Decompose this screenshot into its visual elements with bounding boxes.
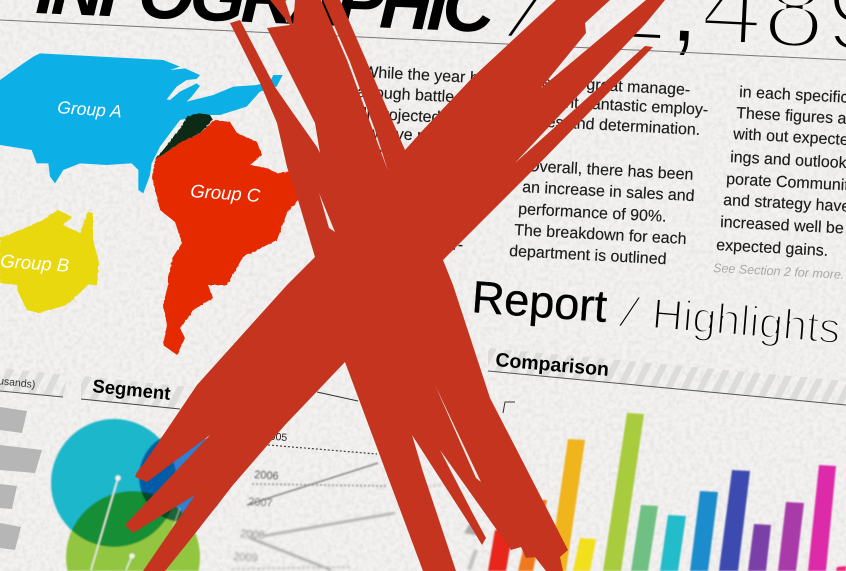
- body text column 1 and 2 top: per-: [434, 236, 464, 254]
- red X crossing out the page: [125, 0, 665, 571]
- stroke slivers: [319, 193, 481, 482]
- map region: Group A: [0, 53, 283, 193]
- venn pointer lines: [91, 475, 180, 570]
- body text column 1 and 2 top: a tough battle to: [357, 84, 472, 107]
- venn diagram: [51, 419, 227, 571]
- map region: Group C: Group C: [190, 180, 262, 206]
- world map: [0, 53, 298, 355]
- body text column 2: Overall, there has been: [527, 158, 694, 184]
- colour column chart: [488, 413, 846, 571]
- heading: Report: Report: [470, 271, 609, 332]
- section header: Segment: Segment: [92, 375, 171, 404]
- timeline line chart: 2005: [263, 430, 288, 444]
- map region: Group A: Group A: [57, 97, 122, 121]
- body text column 3: increased well be: [720, 214, 844, 237]
- section header: Comparison: [488, 348, 846, 405]
- body text column 3: ings and outlook: [730, 149, 846, 172]
- timeline line chart: 2007: [248, 496, 273, 510]
- corner bracket: [503, 402, 515, 413]
- title figure: / 2,489: [494, 0, 846, 76]
- map region: overlap: [155, 113, 213, 160]
- body text column 2: an increase in sales and: [522, 179, 695, 205]
- map region: Group B: [0, 210, 99, 313]
- body text column 1 and 2 top: o: [326, 207, 336, 224]
- body text column 1 and 2 top: While the year has: [363, 64, 496, 88]
- map region: Group C: [152, 120, 298, 355]
- body text column 1 and 2 top: been a great manage-: [533, 74, 691, 99]
- body text column 2: performance of 90%.: [518, 201, 667, 226]
- heading: / Highlights: /: [614, 289, 645, 337]
- timeline line chart: 2008: [240, 528, 265, 542]
- body text column 2: [509, 158, 695, 268]
- timeline line chart: [232, 430, 480, 570]
- map region: Group B: Group B: [0, 250, 70, 276]
- section header: Segment: [81, 375, 358, 411]
- footnote: See Section 2 for more.: [713, 261, 845, 282]
- body text column 1 and 2 top: resources and determination.: [493, 111, 701, 139]
- section header: Comparison: Comparison: [495, 349, 610, 381]
- timeline line chart: 2009: [233, 551, 258, 565]
- body text column 3: expected gains.: [716, 237, 829, 260]
- body text column 3: in each specific: [739, 84, 846, 107]
- body text column 2: department is outlined: [509, 243, 667, 268]
- horizontal bar chart: [0, 407, 42, 550]
- body text column 3: [713, 84, 846, 282]
- header rule: [0, 20, 846, 60]
- body text column 2: The breakdown for each: [514, 222, 687, 248]
- heading: / Highlights: Highlights: [650, 290, 842, 353]
- body text column 1 and 2 top: n: [378, 145, 388, 162]
- body text column 1 and 2 top: all projected goals: [354, 105, 483, 129]
- body text column 1 and 2 top: we've made: [371, 125, 458, 146]
- body text column 1 and 2 top: excellent, fantastic employ-: [515, 92, 709, 119]
- body text column 1 and 2 top: [326, 64, 709, 254]
- section header: thousands: [0, 368, 68, 397]
- timeline line chart: 2006: [254, 469, 279, 483]
